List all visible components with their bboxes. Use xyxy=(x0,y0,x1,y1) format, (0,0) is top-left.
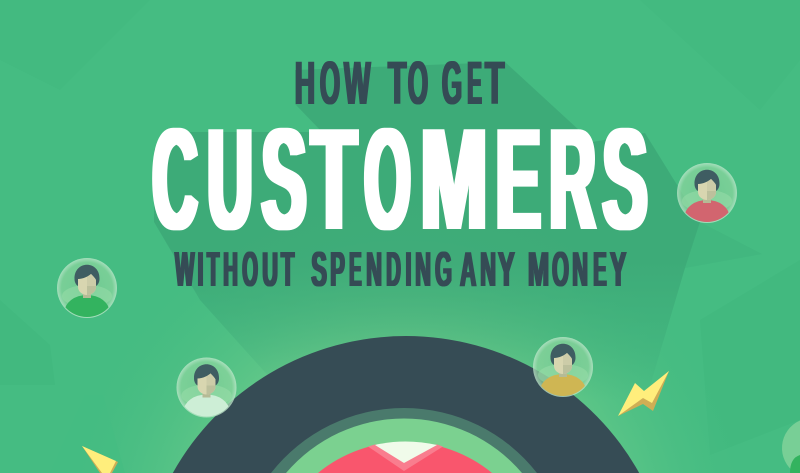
dial: red centre xyxy=(318,442,492,473)
title: how to get: O xyxy=(320,49,340,117)
dial xyxy=(173,336,639,473)
long text shadow xyxy=(154,62,762,420)
subtitle: without spending any money: H xyxy=(223,242,238,297)
title: how to get: T xyxy=(388,49,406,117)
subtitle: without spending any money: E xyxy=(593,242,607,297)
subtitle: without spending any money: O xyxy=(552,242,569,297)
subtitle: without spending any money: S xyxy=(311,242,327,297)
subtitle: without spending any money: I xyxy=(198,242,204,297)
title: how to get: W xyxy=(344,49,371,117)
subtitle: without spending any money: M xyxy=(528,242,549,297)
title: how to get: G xyxy=(442,49,462,117)
dial: pointer xyxy=(368,442,443,471)
subtitle: without spending any money: E xyxy=(349,242,362,297)
icon: lightning bolt right xyxy=(618,371,669,416)
customer bubble: yellow xyxy=(533,337,593,397)
text: S xyxy=(603,98,647,260)
title: how to get: T xyxy=(485,49,504,117)
subtitle: without spending any money: N xyxy=(415,242,431,297)
title: customers: T xyxy=(311,98,357,260)
title: customers: S xyxy=(262,98,306,260)
customer bubble: partial right xyxy=(782,420,800,473)
subtitle: without spending any money: U xyxy=(262,242,278,297)
customer bubble: green xyxy=(57,258,117,318)
subtitle: without spending any money: W xyxy=(175,242,195,297)
subtitle: without spending any money: Y xyxy=(498,242,515,297)
title: customers: U xyxy=(208,98,252,260)
subtitle: without spending any money: N xyxy=(480,242,496,297)
title: customers: O xyxy=(364,98,410,260)
title: how to get: O xyxy=(408,49,428,117)
text: Y xyxy=(610,242,626,297)
subtitle: without spending any money: N xyxy=(366,242,382,297)
title: how to get: E xyxy=(467,49,482,117)
subtitle: without spending any money: P xyxy=(330,242,345,297)
title: customers: R xyxy=(550,98,596,260)
subtitle: without spending any money: N xyxy=(572,242,588,297)
icon: lightning bolt left xyxy=(82,446,118,473)
subtitle: without spending any money: A xyxy=(460,242,476,297)
customer bubble: red xyxy=(677,163,737,223)
subtitle: without spending any money: T xyxy=(207,242,219,297)
title: customers: C xyxy=(153,98,197,260)
customer bubble: white xyxy=(176,358,236,418)
subtitle: without spending any money: G xyxy=(435,242,452,297)
subtitle: without spending any money: T xyxy=(281,242,294,297)
subtitle: without spending any money: I xyxy=(406,242,412,297)
title: customers: M xyxy=(420,98,488,260)
subtitle: without spending any money: O xyxy=(242,242,258,297)
title: customers: E xyxy=(496,98,541,260)
title: how to get: H xyxy=(295,49,315,117)
subtitle: without spending any money: D xyxy=(386,242,401,297)
